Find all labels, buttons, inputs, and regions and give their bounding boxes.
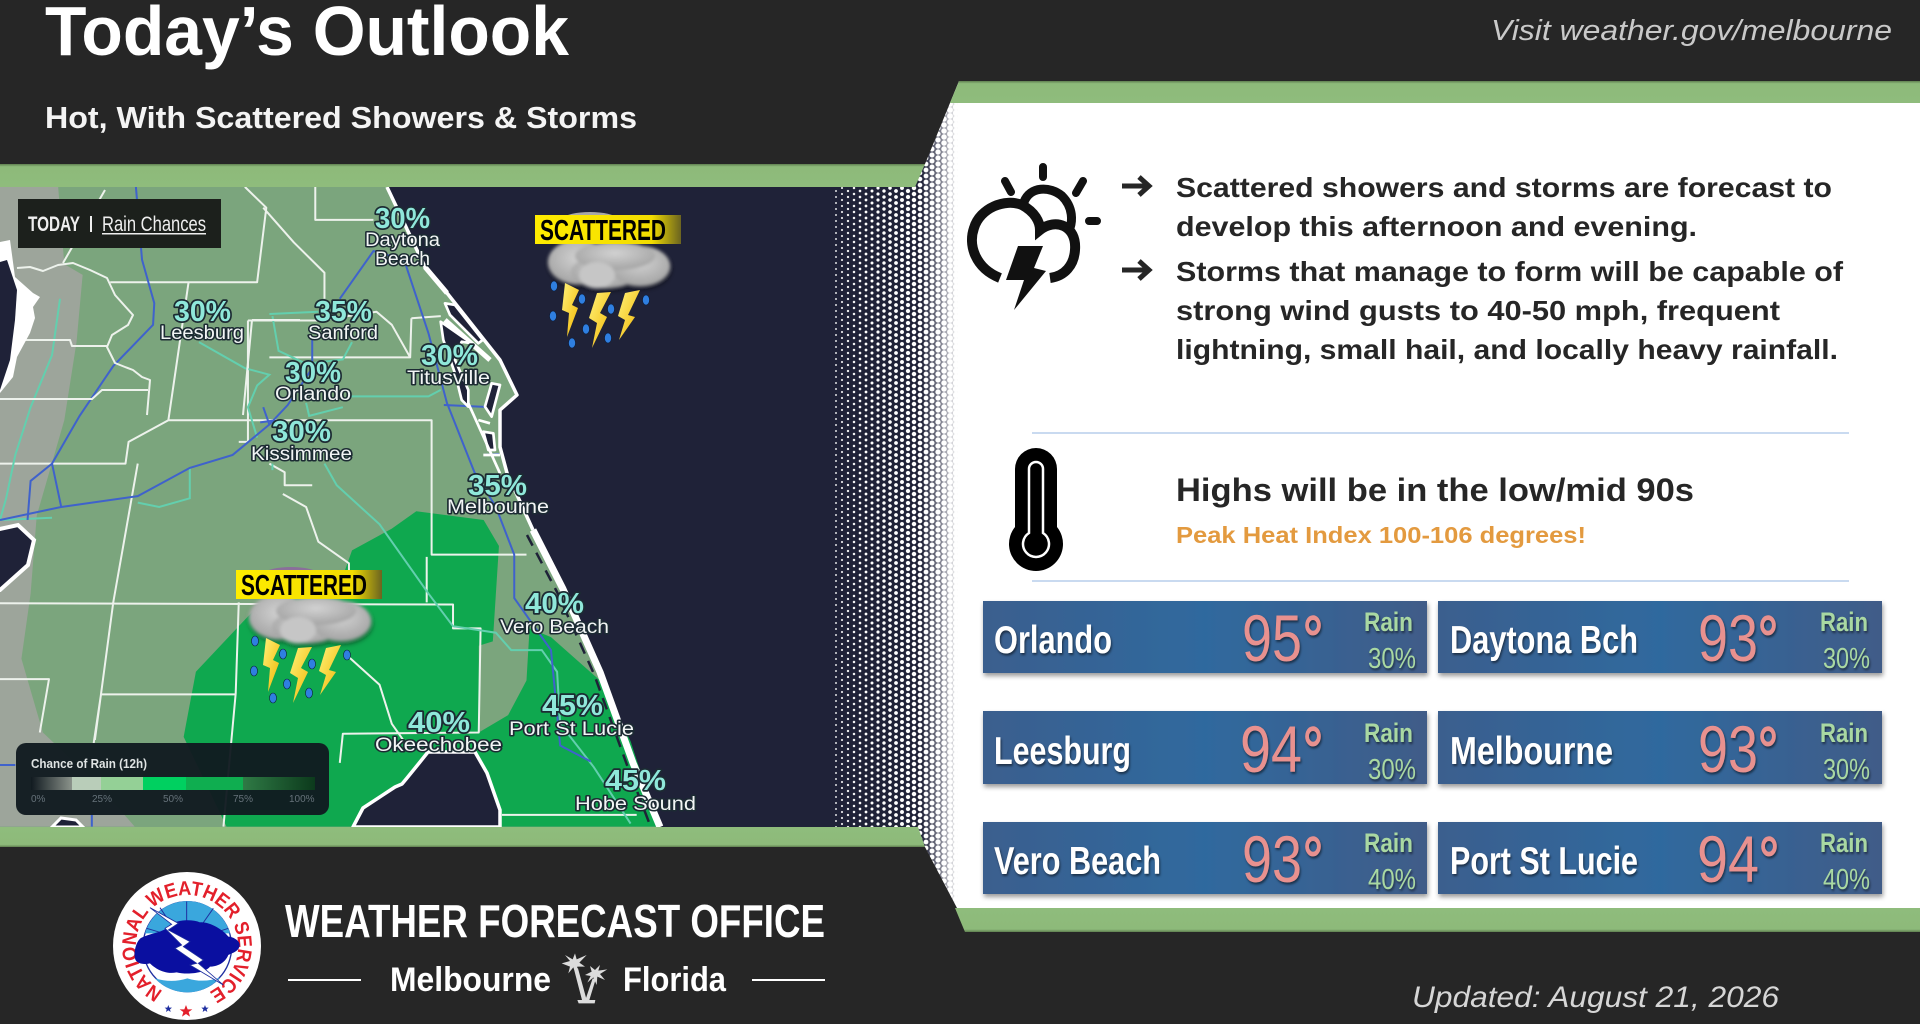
label: titusville: 30% <box>421 340 478 372</box>
icon: scattered storm inland <box>236 567 382 703</box>
text: peak heat index: Peak Heat Index 100-106 degrees! <box>1176 522 1586 548</box>
website link: Visit weather.gov/melbourne <box>1491 15 1892 47</box>
label: titusville: Titusville <box>407 368 490 389</box>
arrow bullet 2 <box>1122 261 1149 279</box>
text block: storm summary: Storms that manage to form will be capable of <box>1176 256 1844 287</box>
label: vero beach: Vero Beach <box>500 617 609 638</box>
footer accent bar left <box>0 827 925 847</box>
label: okeechobee: Okeechobee <box>375 735 502 756</box>
halftone transition <box>833 80 959 930</box>
card: leesburg: 94 <box>1240 712 1302 786</box>
card: melbourne: ° <box>1758 712 1778 786</box>
card: port st lucie: Rain <box>1820 828 1868 858</box>
label: hobe sound: 45% <box>605 765 666 797</box>
card: port st lucie: 40% <box>1823 864 1870 896</box>
icon: scattered storm offshore <box>535 212 681 348</box>
card: daytona beach: Rain <box>1820 607 1868 637</box>
label: kissimmee <box>251 416 352 465</box>
card: daytona beach: ° <box>1758 601 1778 675</box>
text block: storm summary: lightning, small hail, and locally heavy rainfall. <box>1176 334 1838 365</box>
badge: today rain chances: TODAY <box>28 213 80 236</box>
label: daytona beach: Beach <box>375 249 430 270</box>
text block: storm summary: Scattered showers and storms are forecast to <box>1176 172 1832 203</box>
legend: chance of rain: 75% <box>233 794 253 805</box>
arrow bullet 1 <box>1122 177 1149 195</box>
card: melbourne: Rain <box>1820 718 1868 748</box>
county lines west <box>0 190 300 415</box>
label: vero beach <box>500 588 609 638</box>
label: orlando: 30% <box>285 357 341 389</box>
legend: chance of rain: 25% <box>92 794 112 805</box>
florida land <box>0 187 660 827</box>
label: sanford <box>308 296 378 344</box>
label: leesburg <box>160 296 244 344</box>
card: orlando: ° <box>1303 601 1323 675</box>
card: leesburg: Leesburg <box>994 730 1131 773</box>
card: daytona beach: 93 <box>1698 601 1758 675</box>
legend: chance of rain <box>16 743 329 815</box>
label: orlando: Orlando <box>275 384 351 405</box>
logo: national weather service: NATIONAL WEATHER SERVICE <box>122 881 252 1004</box>
card: leesburg: ° <box>1303 712 1323 786</box>
ocean background <box>0 80 960 930</box>
card: port st lucie: Port St Lucie <box>1450 840 1638 883</box>
legend: chance of rain: 0% <box>31 794 46 805</box>
card: leesburg: 30% <box>1368 754 1416 786</box>
icon: storm with sun <box>972 167 1097 310</box>
legend: chance of rain: Chance of Rain (12h) <box>31 756 147 771</box>
card: orlando: 30% <box>1368 643 1416 675</box>
panel accent bar top <box>950 81 1920 103</box>
wordmark: melbourne florida: Melbourne <box>390 961 551 999</box>
icon: thermometer <box>1009 448 1063 571</box>
label: kissimmee: 30% <box>272 416 331 448</box>
lake okeechobee <box>353 752 500 827</box>
panel accent bar bottom <box>955 908 1920 932</box>
card: orlando: Rain <box>1364 607 1413 637</box>
header accent bar left <box>0 164 925 187</box>
text: highs: Highs will be in the low/mid 90s <box>1176 472 1694 508</box>
card: melbourne: 30% <box>1823 754 1870 786</box>
label: daytona beach: 30% <box>375 203 430 235</box>
label: leesburg: Leesburg <box>160 323 244 344</box>
label: hobe sound <box>575 765 696 815</box>
icon: scattered storm offshore: SCATTERED <box>540 215 666 247</box>
card: orlando: Orlando <box>994 619 1112 662</box>
footer band <box>0 847 1920 1024</box>
card: orlando <box>983 601 1427 675</box>
label: vero beach: 40% <box>525 588 584 620</box>
icon: scattered storm inland: SCATTERED <box>241 570 367 602</box>
label: melbourne <box>447 470 549 518</box>
updated date: Updated: August 21, 2026 <box>1412 981 1779 1014</box>
label: port st lucie: 45% <box>542 690 603 722</box>
card: vero beach: ° <box>1303 822 1323 896</box>
card: vero beach: 93 <box>1242 822 1302 896</box>
icon: palm trees <box>562 953 607 1003</box>
card: leesburg: Rain <box>1364 718 1413 748</box>
card: leesburg <box>983 711 1427 786</box>
legend: chance of rain: 50% <box>163 794 183 805</box>
text block: storm summary: develop this afternoon and evening. <box>1176 211 1697 242</box>
label: hobe sound: Hobe Sound <box>575 794 696 815</box>
label: orlando <box>275 357 351 405</box>
card: port st lucie: ° <box>1759 822 1779 896</box>
text block: storm summary <box>1176 172 1844 365</box>
badge: today rain chances <box>18 199 221 248</box>
label: daytona beach: Daytona <box>365 230 440 251</box>
card: vero beach: 40% <box>1368 864 1416 896</box>
card: daytona beach: 30% <box>1823 643 1870 675</box>
label: port st lucie: Port St Lucie <box>509 719 634 740</box>
badge: today rain chances: Rain Chances <box>102 213 206 236</box>
label: port st lucie <box>509 690 634 740</box>
wordmark: weather forecast office: WEATHER FORECAST OFFICE <box>285 895 825 947</box>
text block: storm summary: strong wind gusts to 40-50 mph, frequent <box>1176 295 1780 326</box>
label: sanford: Sanford <box>308 323 378 344</box>
panel: white content <box>958 100 1920 910</box>
atlantic coast and barrier islands <box>387 187 660 827</box>
card: daytona beach <box>1438 601 1882 675</box>
card: melbourne: 93 <box>1698 712 1758 786</box>
card: vero beach: Rain <box>1364 828 1413 858</box>
card: daytona beach: Daytona Bch <box>1450 619 1638 662</box>
subtitle: Hot, With Scattered Showers & Storms <box>45 100 637 135</box>
western water <box>0 240 83 827</box>
card: melbourne <box>1438 711 1882 786</box>
legend: chance of rain: 100% <box>289 794 315 805</box>
wordmark: melbourne florida: Florida <box>623 961 727 999</box>
header band <box>0 0 1920 164</box>
label: leesburg: 30% <box>174 296 231 328</box>
label: okeechobee: 40% <box>408 707 470 739</box>
label: okeechobee <box>375 707 502 756</box>
label: melbourne: Melbourne <box>447 497 549 518</box>
label: titusville <box>407 340 490 389</box>
label: melbourne: 35% <box>468 470 527 502</box>
card: melbourne: Melbourne <box>1450 730 1613 773</box>
label: kissimmee: Kissimmee <box>251 444 352 465</box>
card: vero beach <box>983 822 1427 896</box>
card: vero beach: Vero Beach <box>994 840 1161 883</box>
card: orlando: 95 <box>1242 601 1302 675</box>
wordmark: melbourne florida <box>288 961 825 999</box>
card: port st lucie <box>1438 822 1882 896</box>
label: daytona beach <box>365 203 440 270</box>
florida map detail <box>0 187 658 827</box>
label: sanford: 35% <box>315 296 372 328</box>
card: port st lucie: 94 <box>1697 822 1759 896</box>
